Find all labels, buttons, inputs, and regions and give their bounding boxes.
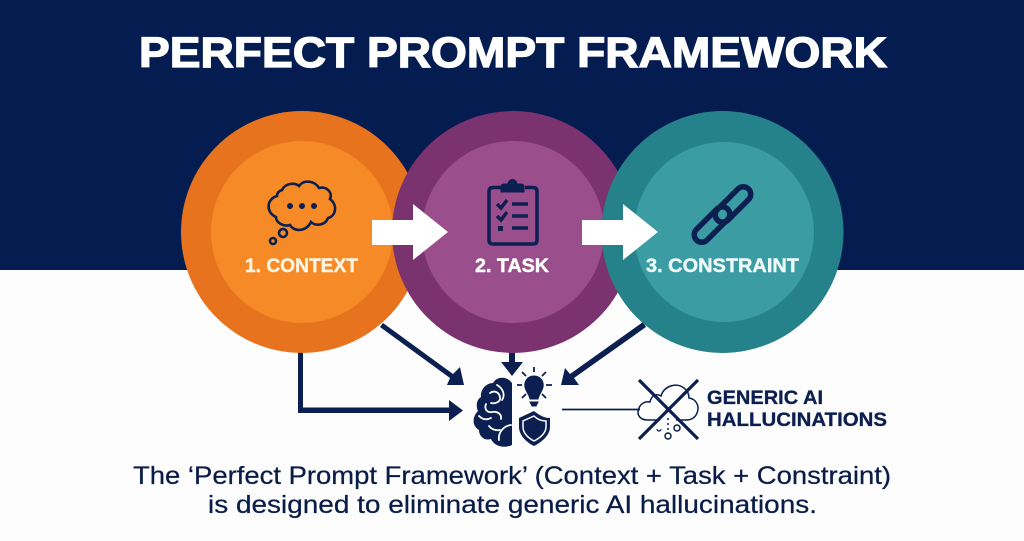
caption text: is designed to eliminate generic AI hallucinations.: [208, 491, 817, 519]
icon: light bulb: [517, 367, 552, 406]
icon: chain link: [691, 184, 754, 245]
label: generic AI hallucinations: HALLUCINATIONS: [707, 410, 887, 431]
icon: clipboard checklist: [489, 180, 537, 244]
title: PERFECT PROMPT FRAMEWORK: [139, 29, 887, 77]
connector line to hallucination icon: [562, 408, 640, 410]
label: context: 1. CONTEXT: [245, 256, 358, 277]
label: generic AI hallucinations: GENERIC AI: [707, 388, 823, 409]
panel: orange context circle: [181, 111, 423, 353]
icon: brain, bulb and shield: [474, 367, 552, 447]
icon: thought bubble: [269, 182, 335, 244]
icon: crossed-out cloud: [638, 380, 698, 439]
arrow: context to task: [372, 204, 448, 260]
arrow: task to constraint: [582, 204, 658, 260]
connector arrows into the central icon: [298, 322, 646, 421]
panel: purple task circle: [392, 111, 634, 353]
label: task: 2. TASK: [475, 256, 549, 277]
panel: teal constraint circle: [602, 111, 844, 353]
icon: shield: [519, 411, 550, 446]
label: generic AI hallucinations: [707, 388, 887, 431]
caption text: [133, 462, 891, 519]
label: constraint: 3. CONSTRAINT: [646, 256, 799, 277]
caption text: The ‘Perfect Prompt Framework’ (Context + Task + Constraint): [133, 462, 891, 490]
icon: brain folds: [479, 385, 511, 440]
icon: brain: [474, 378, 512, 447]
